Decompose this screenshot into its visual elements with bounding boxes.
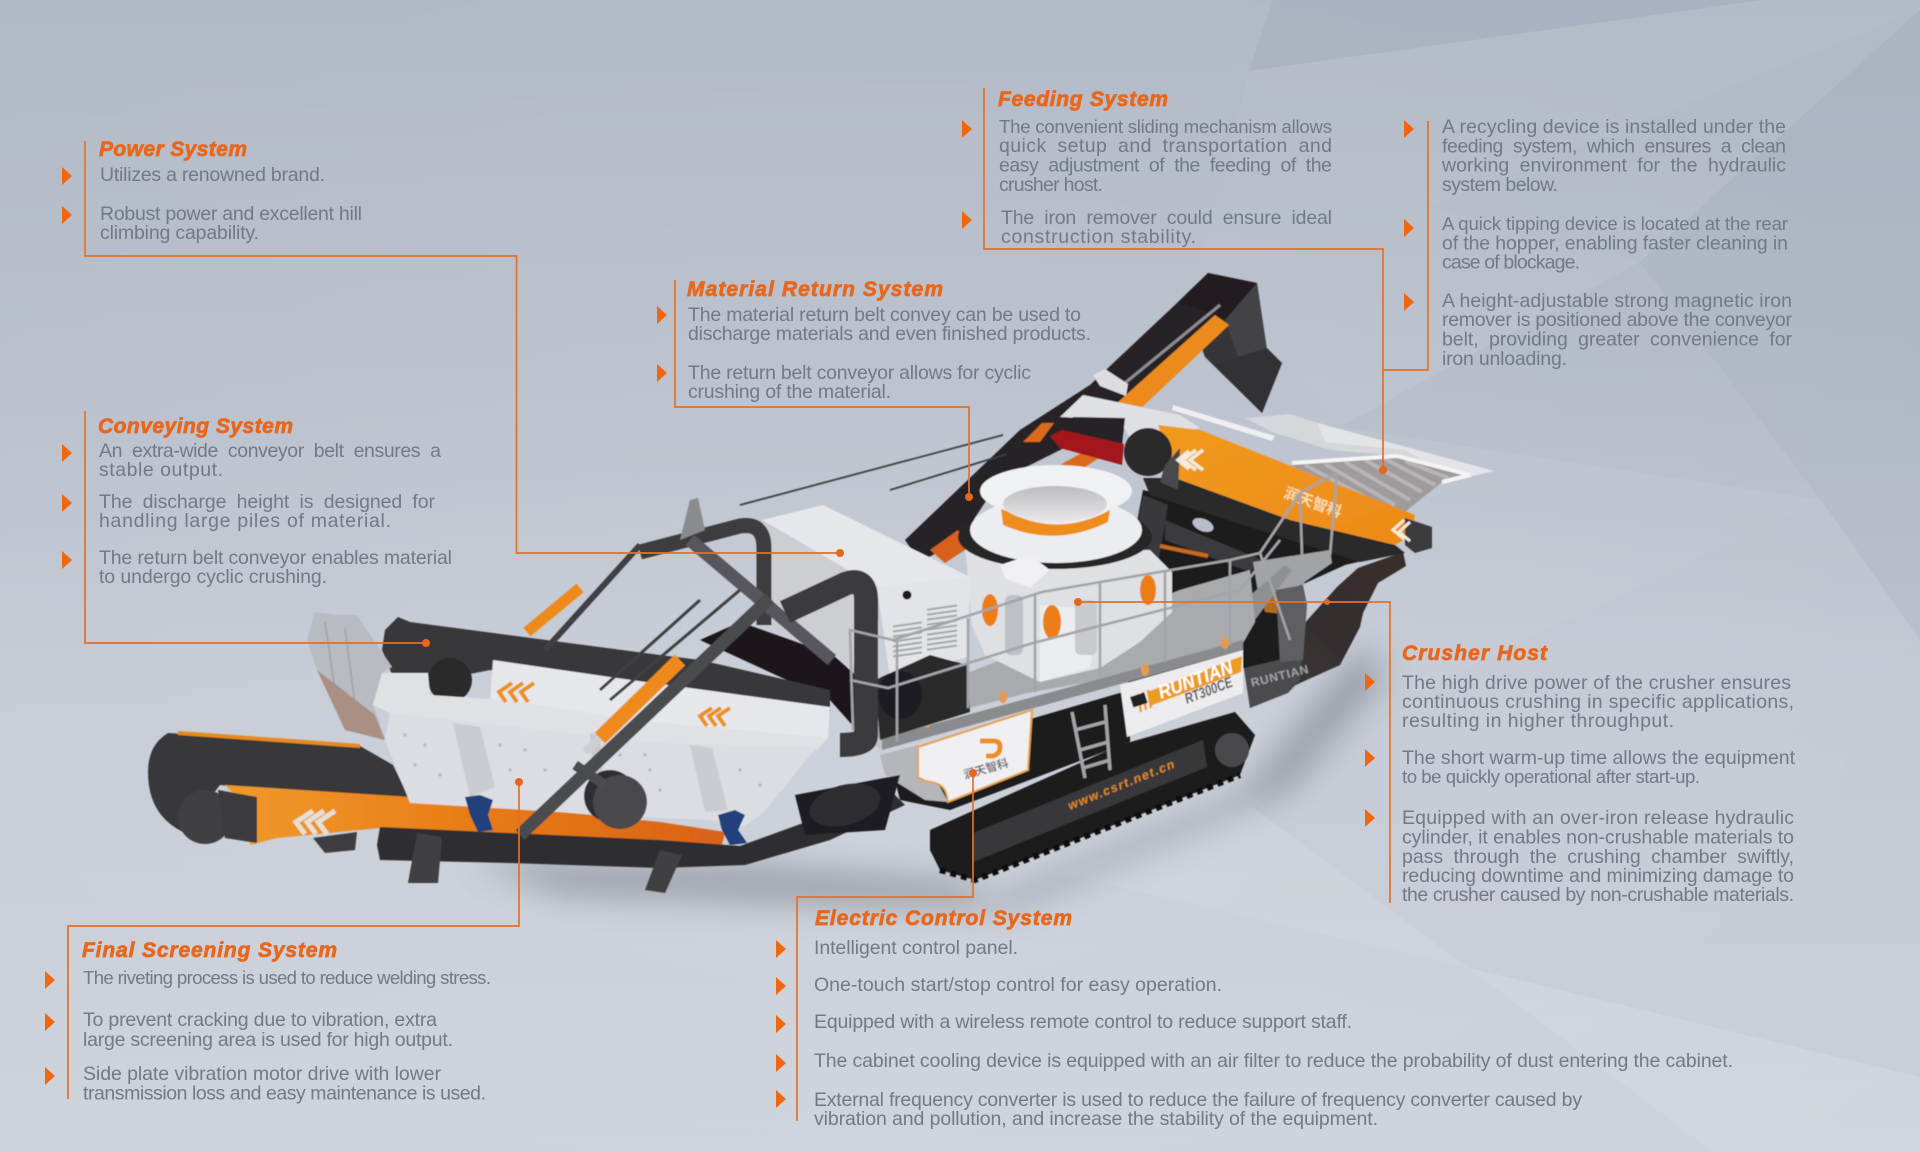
connector: conveying system [85,411,430,647]
item: motor drive [45,1063,486,1104]
item: over-iron release: pass through the crushing chamber swiftly, [1402,846,1794,868]
panel: final screening system [45,939,491,1104]
white side panel with RUNTIAN RT300CE [1120,650,1243,737]
item: quick tipping: A quick tipping device is located at the rear [1442,213,1788,234]
item: frequency converter: External frequency converter is used to reduce the failure of frequency converter caused by [814,1089,1582,1111]
frame under feeder [1125,490,1400,690]
item: cyclic [657,362,1031,403]
illustration: mobile cone crusher machine [148,273,1494,893]
item: drive power: continuous crushing in specific applications, [1402,691,1794,713]
item: sliding mechanism: crusher host. [999,174,1103,196]
connector: final screening system [68,778,523,1099]
item: iron remover: The iron remover could ensure ideal [1001,207,1332,229]
item: discharge height [62,491,436,532]
connector: power system [85,141,844,557]
dark arches and interior [640,498,872,745]
return belt conveyor and chute [905,273,1282,563]
connector: electric control system [797,769,977,1121]
item: cyclic crushing: The return belt conveyor enables material [99,547,452,569]
item: discharge height: handling large piles of material. [99,510,391,532]
item: over-iron release: reducing downtime and minimizing damage to [1402,865,1794,887]
item: return belt: discharge materials and even finished products. [688,323,1091,345]
item: magnetic remover: iron unloading. [1442,348,1567,370]
item: wide belt: An extra-wide conveyor belt ensures a [99,440,441,462]
item: recycling device: system below. [1442,174,1558,196]
item: quick tipping: of the hopper, enabling faster cleaning in [1442,232,1788,254]
chassis beam and legs [377,775,905,893]
tail and rear chassis [1243,552,1406,708]
brand text: RUNTIAN [1156,657,1237,704]
item: motor drive: Side plate vibration motor drive with lower [83,1063,442,1085]
item: discharge height: The discharge height is designed for [99,491,436,513]
item: drive power: resulting in higher throughput. [1402,710,1674,732]
heading: electric control system: Electric Control System [815,907,1072,930]
panel: conveying system [62,415,452,588]
handrails and ladder [850,473,1337,778]
panel: electric control system [776,907,1733,1130]
heading: feeding system: Feeding System [998,88,1168,111]
item: over-iron release: Equipped with an over-iron release hydraulic [1402,807,1794,829]
item: sliding mechanism [962,116,1332,196]
item: wide belt: stable output. [99,459,223,481]
power unit enclosure [762,505,970,740]
item: hill climbing [62,203,362,244]
panel: material return system [657,278,1091,403]
brand on conveyor: 润天智科 [1282,484,1344,521]
blue rubber springs [465,795,747,845]
feeding hopper with grate bars [1245,414,1494,512]
heading: material return system: Material Return System [687,278,943,301]
item: cyclic: The return belt conveyor allows for cyclic [688,362,1031,384]
crusher base and stage [853,550,1332,810]
item: hill climbing: Robust power and excellent hill [100,203,362,225]
heading: power system: Power System [99,138,247,161]
item: magnetic remover: remover is positioned above the conveyor [1442,309,1792,331]
item: recycling device: working environment for the hydraulic [1441,155,1786,177]
feeder conveyor: orange body, drum, red cylinder [1050,395,1432,562]
item: cyclic: crushing of the material. [688,381,891,403]
hydraulic cylinders and braces [520,435,1007,835]
item: riveting: The riveting process is used to reduce welding stress. [83,967,491,988]
item: warm-up [1365,747,1796,787]
item: iron remover: construction stability. [1001,226,1196,248]
item: over-iron release [1365,807,1794,906]
item: screening area: large screening area is used for high output. [83,1029,453,1051]
item: sliding mechanism: quick setup and transportation and [999,135,1332,157]
panel: power system [62,138,362,244]
connector: crusher host [1074,598,1390,903]
connector: material return system [675,280,973,501]
item: hill climbing: climbing capability. [100,222,259,244]
item: magnetic remover [1404,290,1792,370]
lower discharge conveyor [148,731,725,853]
machine shadow on ground [470,645,1385,910]
item: frequency converter: vibration and pollution, and increase the stability of the equipment. [814,1108,1378,1130]
item: control panel: Intelligent control panel. [814,937,1018,959]
item: screening area: To prevent cracking due to vibration, extra [83,1009,437,1031]
item: recycling device: A recycling device is installed under the [1442,116,1786,138]
item: wide belt [62,440,441,481]
control box panel [880,710,1032,802]
panel: feeding system [962,88,1332,248]
item: sliding mechanism: The convenient sliding mechanism allows [999,116,1332,137]
item: quick tipping [1404,213,1788,274]
item: drive power: The high drive power of the crusher ensures [1402,672,1791,694]
item: over-iron release: the crusher caused by non-crushable materials. [1402,884,1794,906]
item: renowned brand: Utilizes a renowned brand. [100,164,325,186]
item: motor drive: transmission loss and easy maintenance is used. [83,1082,486,1104]
crawler track [930,712,1255,880]
item: remote control: Equipped with a wireless remote control to reduce support staff. [814,1011,1352,1033]
item: iron remover [962,207,1332,248]
item: cooling device: The cabinet cooling device is equipped with an air filter to reduce the probability of dust entering the cabinet. [814,1050,1733,1072]
item: sliding mechanism: easy adjustment of the feeding of the [999,154,1332,176]
tail and rear chassis: RUNTIAN [1249,662,1311,690]
item: recycling device: feeding system, which ensures a clean [1442,135,1786,157]
item: over-iron release: cylinder, it enables non-crushable materials to [1402,826,1794,848]
heading: crusher host: Crusher Host [1402,642,1548,665]
vibrating screen body [307,612,830,827]
item: frequency converter [776,1089,1582,1130]
item: drive power [1365,672,1794,732]
item: quick tipping: case of blockage. [1442,252,1580,274]
item: return belt: The material return belt convey can be used to [688,304,1081,326]
item: magnetic remover: belt, providing greater convenience for [1442,328,1792,350]
panel: crusher host [1365,642,1796,906]
item: warm-up: The short warm-up time allows the equipment [1402,747,1796,769]
item: recycling device [1404,116,1786,196]
item: magnetic remover: A height-adjustable strong magnetic iron [1442,290,1792,312]
item: screening area [45,1009,453,1051]
panel: feeding details [1404,116,1792,370]
item: return belt [657,304,1091,345]
brand on control box: 润天智科 [962,756,1011,782]
website on track: www.csrt.net.cn [1066,757,1178,813]
item: cyclic crushing [62,547,452,588]
vibration motor [584,770,647,829]
item: cyclic crushing: to undergo cyclic crushing. [99,566,327,588]
connector: feeding system [984,88,1428,474]
item: warm-up: to be quickly operational after start-up. [1402,766,1700,787]
heading: final screening system: Final Screening System [82,939,337,962]
model text: RT300CE [1182,674,1236,708]
heading: conveying system: Conveying System [98,415,293,438]
cone crusher [958,465,1172,682]
item: one-touch: One-touch start/stop control for easy operation. [814,974,1222,996]
